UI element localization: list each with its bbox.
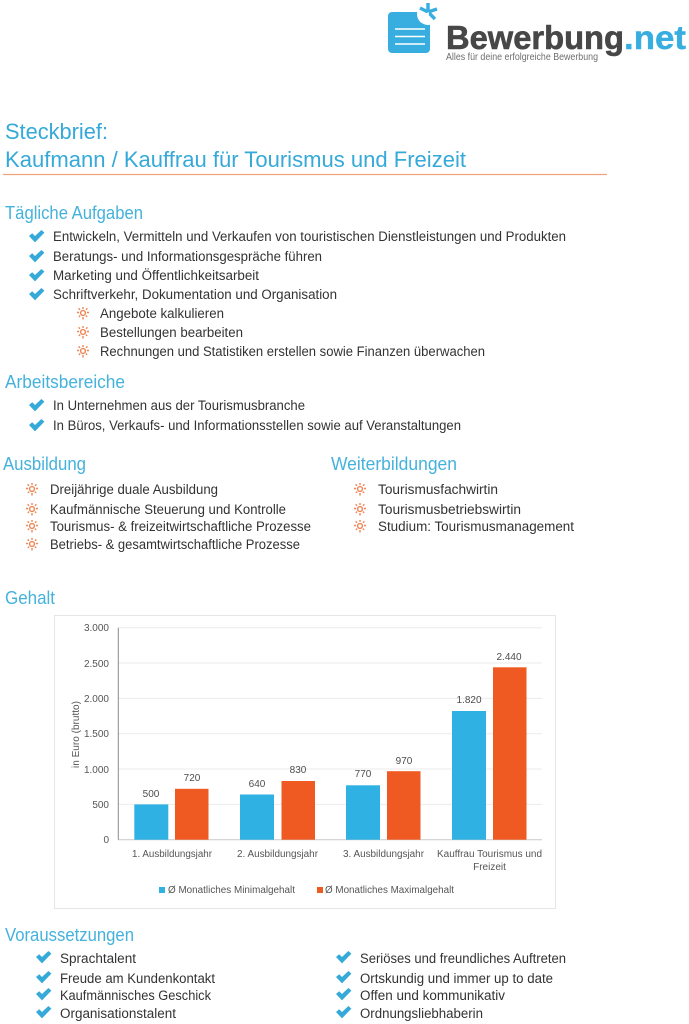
list: Tourismusbetriebswirtin	[378, 502, 521, 517]
list: Studium: Tourismusmanagement	[378, 519, 574, 534]
bars: 3. Ausbildungsjahr: 970	[396, 756, 413, 767]
list: Betriebs- & gesamtwirtschaftliche Prozesse	[50, 537, 300, 552]
bars: 2. Ausbildungsjahr: 640	[249, 779, 266, 790]
category labels: Freizeit	[473, 862, 506, 873]
y axis labels: 500	[92, 800, 109, 811]
check list: Entwickeln, Vermitteln und Verkaufen von touristischen Dienstleistungen und Produkten	[53, 229, 566, 244]
list: Tourismusfachwirtin	[378, 482, 498, 497]
brand name: Bewerbung	[446, 19, 624, 56]
logo	[388, 3, 686, 63]
bars: 3. Ausbildungsjahr	[346, 756, 420, 840]
right list: Seriöses und freundliches Auftreten	[360, 951, 566, 966]
list	[354, 482, 574, 534]
category labels: Kauffrau Tourismus und	[437, 849, 542, 860]
title: Steckbrief:	[5, 119, 108, 144]
sub list	[77, 306, 485, 359]
y axis title: in Euro (brutto)	[71, 701, 82, 768]
bars: 1. Ausbildungsjahr: 720	[184, 773, 201, 784]
y axis labels: 2.000	[84, 694, 109, 705]
heading: Gehalt: Gehalt	[5, 587, 55, 608]
list: Tourismus- & freizeitwirtschaftliche Prozesse	[50, 519, 311, 534]
tagline: Alles für deine erfolgreiche Bewerbung	[446, 52, 598, 63]
sub list: Angebote kalkulieren	[100, 306, 224, 321]
check list: In Unternehmen aus der Tourismusbranche	[53, 398, 305, 413]
title	[3, 119, 607, 174]
legend	[159, 885, 454, 896]
bars: 1. Ausbildungsjahr: 500	[143, 789, 160, 800]
panel: tägliche Aufgaben	[5, 202, 566, 359]
heading: Arbeitsbereiche	[5, 371, 125, 392]
panel: Weiterbildungen	[331, 453, 574, 534]
y axis labels: 0	[103, 835, 109, 846]
bars: 2. Ausbildungsjahr	[240, 765, 315, 840]
heading: Tägliche Aufgaben	[5, 202, 143, 223]
right list	[336, 951, 566, 1021]
bars: 3. Ausbildungsjahr: 770	[355, 769, 372, 780]
legend: Ø Monatliches Minimalgehalt	[168, 885, 295, 896]
left list: Sprachtalent	[60, 951, 136, 966]
list: Kaufmännische Steuerung und Kontrolle	[50, 502, 286, 517]
check list: Beratungs- und Informationsgespräche führen	[53, 249, 322, 264]
y axis labels: 2.500	[84, 659, 109, 670]
category labels	[132, 849, 542, 873]
category labels: 3. Ausbildungsjahr	[343, 849, 425, 860]
left list: Organisationstalent	[60, 1006, 176, 1021]
panel: Arbeitsbereiche	[5, 371, 461, 433]
check list	[29, 398, 461, 433]
left list: Kaufmännisches Geschick	[60, 988, 211, 1003]
category labels: 2. Ausbildungsjahr	[237, 849, 319, 860]
list: Dreijährige duale Ausbildung	[50, 482, 218, 497]
right list: Ordnungsliebhaberin	[360, 1006, 483, 1021]
bar chart	[54, 616, 556, 908]
panel: Ausbildung	[3, 453, 311, 552]
heading: Ausbildung	[3, 453, 86, 474]
bars: 2. Ausbildungsjahr: 830	[290, 765, 307, 776]
icon: document with star	[388, 3, 439, 53]
sub list: Rechnungen und Statistiken erstellen sowie Finanzen überwachen	[100, 344, 485, 359]
heading: Voraussetzungen	[5, 924, 134, 945]
check list: Schriftverkehr, Dokumentation und Organisation	[53, 287, 337, 302]
brand suffix: .net	[624, 19, 686, 56]
y axis labels: 3.000	[84, 623, 109, 634]
bars: 1. Ausbildungsjahr	[134, 773, 208, 840]
sub list: Bestellungen bearbeiten	[100, 325, 243, 340]
category labels: 1. Ausbildungsjahr	[132, 849, 213, 860]
check list	[29, 229, 566, 302]
panel: Voraussetzungen	[5, 924, 566, 1021]
left list	[36, 951, 215, 1021]
legend: Ø Monatliches Maximalgehalt	[325, 885, 454, 896]
check list: In Büros, Verkaufs- und Informationsstellen sowie auf Veranstaltungen	[53, 418, 461, 433]
bars: Kauffrau: 2.440	[496, 652, 522, 663]
check list: Marketing und Öffentlichkeitsarbeit	[53, 268, 259, 283]
left list: Freude am Kundenkontakt	[60, 971, 215, 986]
heading: Weiterbildungen	[331, 453, 457, 474]
y axis labels: 1.500	[84, 729, 109, 740]
y axis labels	[84, 623, 109, 846]
title: Kaufmann / Kauffrau für Tourismus und Freizeit	[5, 147, 467, 172]
list	[26, 482, 311, 552]
right list: Ortskundig und immer up to date	[360, 971, 553, 986]
right list: Offen und kommunikativ	[360, 988, 505, 1003]
y axis labels: 1.000	[84, 765, 109, 776]
bars: Kauffrau	[452, 652, 526, 840]
bars: Kauffrau: 1.820	[456, 695, 482, 706]
